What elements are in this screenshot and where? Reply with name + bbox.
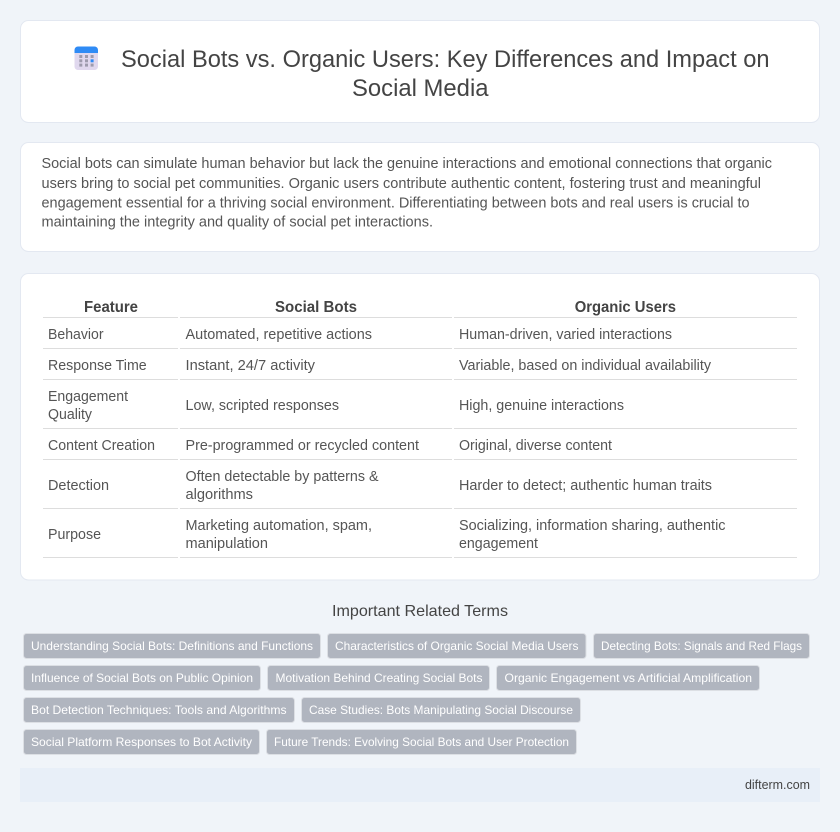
panel: introduction text: users bring to social pet communities. Organic users contribute authentic content, fostering trust and meaningful [42, 176, 761, 192]
row: engagement quality: Quality [48, 407, 93, 423]
row: purpose: Purpose [48, 527, 101, 543]
chip: future trends [266, 730, 576, 754]
row: engagement quality: Engagement [48, 389, 128, 405]
row: detection: Harder to detect; authentic human traits [459, 478, 712, 494]
chip: motivation: Motivation Behind Creating Social Bots [276, 671, 482, 685]
row: purpose: Socializing, information sharing, authentic [459, 518, 726, 534]
row: content creation [48, 438, 612, 454]
chip: case studies [302, 698, 580, 722]
table header row: Feature [84, 299, 138, 316]
row: response time: Instant, 24/7 activity [186, 358, 316, 374]
chip: understanding social bots: Understanding Social Bots: Definitions and Functions [31, 639, 313, 653]
table header row [84, 299, 676, 316]
chip: detecting bots [594, 634, 810, 658]
row: engagement quality: High, genuine interactions [459, 398, 624, 414]
chip: bot detection techniques: Bot Detection Techniques: Tools and Algorithms [31, 703, 286, 717]
table header row: Social Bots [275, 299, 357, 316]
title: Social Media [352, 75, 489, 102]
row: detection: Often detectable by patterns & [186, 469, 379, 485]
chip: motivation [268, 666, 490, 690]
panel: introduction text: Social bots can simulate human behavior but lack the genuine interactions and emotional connections that organic [42, 156, 772, 172]
row: purpose [48, 518, 726, 552]
row: detection: Detection [48, 478, 109, 494]
chip: platform responses [24, 730, 260, 754]
panel: header [20, 20, 820, 122]
chip: characteristics of organic users: Characteristics of Organic Social Media Users [335, 639, 578, 653]
row: content creation: Content Creation [48, 438, 155, 454]
chip: detecting bots: Detecting Bots: Signals and Red Flags [601, 639, 802, 653]
chip: influence on public opinion: Influence of Social Bots on Public Opinion [31, 671, 253, 685]
icon: calendar [74, 46, 98, 70]
chip: case studies: Case Studies: Bots Manipulating Social Discourse [309, 703, 573, 717]
row: response time: Variable, based on individual availability [459, 358, 712, 374]
row: behavior [48, 327, 672, 343]
chip: future trends: Future Trends: Evolving Social Bots and User Protection [274, 735, 569, 749]
row: engagement quality: Low, scripted responses [186, 398, 339, 414]
related terms chips [24, 634, 810, 754]
row: behavior: Human-driven, varied interactions [459, 327, 672, 343]
chip: influence on public opinion [24, 666, 260, 690]
footer: difterm.com [745, 777, 810, 792]
row: purpose: Marketing automation, spam, [186, 518, 372, 534]
footer [20, 768, 820, 802]
row: content creation: Original, diverse content [459, 438, 612, 454]
row: response time [48, 358, 712, 374]
row: response time: Response Time [48, 358, 147, 374]
row: engagement quality [48, 389, 624, 423]
chip: platform responses: Social Platform Responses to Bot Activity [31, 735, 252, 749]
row: behavior: Automated, repetitive actions [186, 327, 372, 343]
table header row: Organic Users [575, 299, 676, 316]
panel: introduction text: engagement essential for a thriving social environment. Differentiating between bots and real users is crucial to [42, 196, 750, 212]
panel: introduction text [20, 142, 820, 252]
row: behavior: Behavior [48, 327, 104, 343]
panel: introduction text: maintaining the integrity and quality of social pet interactions. [42, 214, 433, 230]
title [121, 46, 770, 102]
panel: comparison table [20, 274, 820, 580]
heading: important related terms: Important Related Terms [332, 603, 508, 620]
row: purpose: manipulation [186, 536, 268, 552]
chip: understanding social bots [24, 634, 320, 658]
chip: characteristics of organic users [328, 634, 586, 658]
row: purpose: engagement [459, 536, 538, 552]
row: detection: algorithms [186, 487, 253, 503]
chip: organic engagement: Organic Engagement vs Artificial Amplification [504, 671, 752, 685]
title: Social Bots vs. Organic Users: Key Differences and Impact on [121, 46, 770, 73]
chip: organic engagement [496, 666, 760, 690]
row: detection [48, 469, 712, 503]
row: content creation: Pre-programmed or recycled content [186, 438, 419, 454]
chip: bot detection techniques [24, 698, 294, 722]
